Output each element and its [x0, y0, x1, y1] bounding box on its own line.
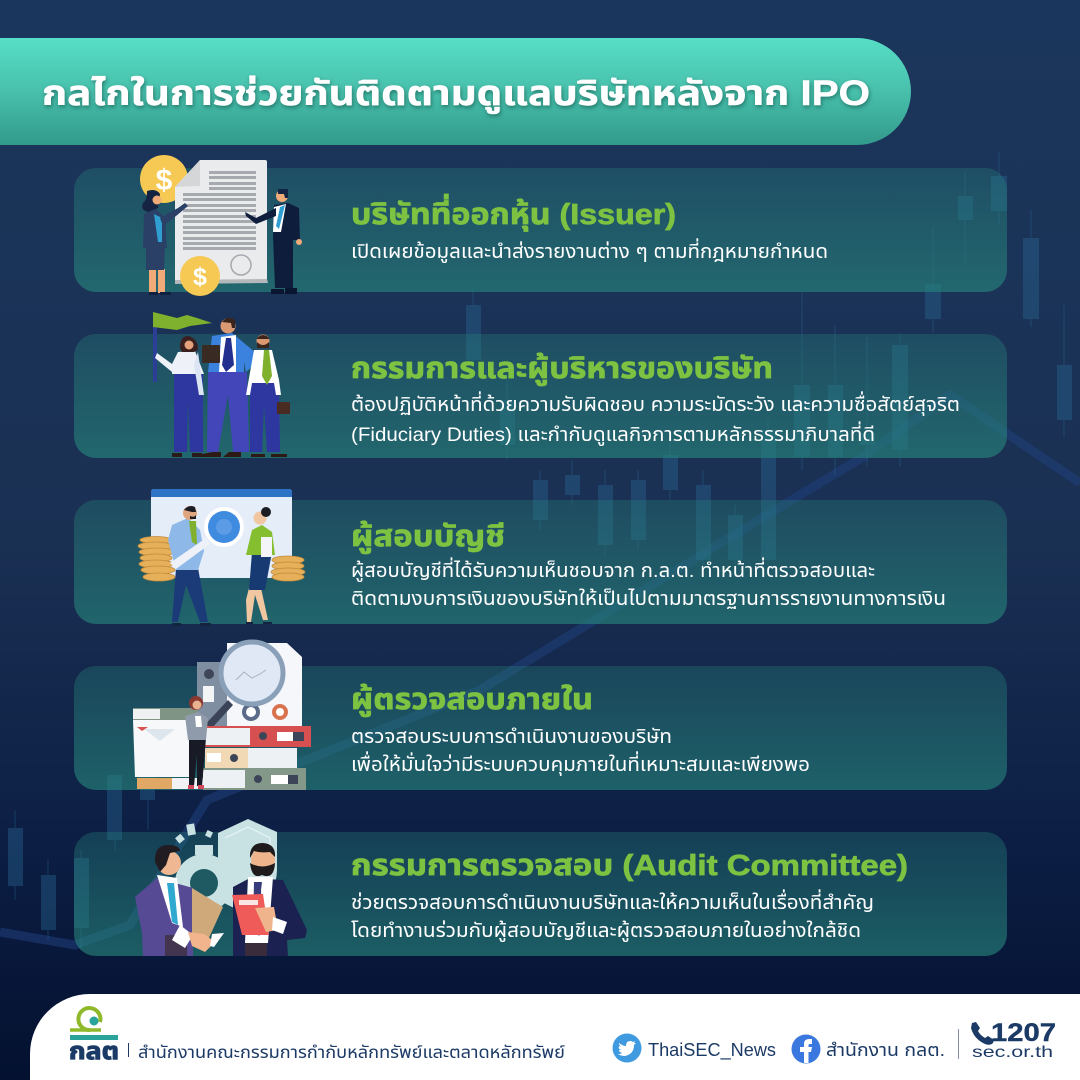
panel: internal audit — [74, 642, 1007, 790]
text: directors: ต้องปฏิบัติหน้าที่ด้วยความรับผิดชอบ ความระมัดระวัง และความซื่อสัตย์สุจริต — [351, 391, 960, 416]
header banner — [0, 38, 911, 145]
icon: SEC logo — [69, 1008, 119, 1065]
icon: three executives with flag — [153, 312, 290, 457]
woman — [149, 269, 165, 293]
left man — [135, 878, 193, 956]
woman — [174, 373, 203, 452]
background candlestick chart — [8, 152, 1072, 950]
heading: audit committee: กรรมการตรวจสอบ (Audit Committee) — [351, 850, 908, 882]
woman — [246, 588, 268, 622]
man — [172, 568, 208, 622]
facebook name: สำนักงาน กลต. — [826, 1040, 945, 1060]
hotline: 1207 — [991, 1019, 1056, 1047]
right man — [250, 382, 280, 452]
heading: directors: กรรมการและผู้บริหารของบริษัท — [351, 353, 773, 386]
text: internal audit: ตรวจสอบระบบการดำเนินงานของบริษัท — [351, 726, 672, 748]
man — [273, 203, 300, 288]
heading: internal audit: ผู้ตรวจสอบภายใน — [351, 684, 593, 717]
text: audit committee: โดยทำงานร่วมกับผู้สอบบัญชีและผู้ตรวจสอบภายในอย่างใกล้ชิด — [351, 919, 861, 943]
panel: issuer — [74, 155, 1007, 296]
icon: document with coins and two people: $ — [156, 164, 173, 197]
divider — [128, 1043, 129, 1057]
website: sec.or.th — [972, 1044, 1053, 1061]
twitter handle: ThaiSEC_News — [648, 1040, 776, 1061]
icon: facebook — [792, 1034, 820, 1064]
heading: issuer: บริษัทที่ออกหุ้น (Issuer) — [351, 193, 676, 231]
title: กลไกในการช่วยกันติดตามดูแลบริษัทหลังจาก IPO — [42, 74, 870, 114]
text: audit committee — [351, 889, 874, 943]
divider — [958, 1029, 959, 1059]
icon: SEC logo: กลต — [69, 1038, 119, 1065]
heading: auditor: ผู้สอบบัญชี — [351, 521, 505, 554]
background trend line — [0, 395, 1080, 945]
text: directors: (Fiduciary Duties) และกำกับดูแลกิจการตามหลักธรรมาภิบาลที่ดี — [351, 421, 875, 447]
icon: two auditors with magnifier and coin stacks — [138, 489, 305, 626]
tall man — [207, 372, 249, 452]
text: issuer: เปิดเผยข้อมูลและนำส่งรายงานต่าง ๆ ตามที่กฎหมายกำหนด — [351, 238, 828, 264]
icon: document with coins and two people — [140, 155, 302, 296]
icon: handshake with gear and shield — [135, 819, 307, 956]
text: audit committee: ช่วยตรวจสอบการดำเนินงานบริษัทและให้ความเห็นในเรื่องที่สำคัญ — [351, 889, 874, 914]
text: auditor: ผู้สอบบัญชีที่ได้รับความเห็นชอบจาก ก.ล.ต. ทำหน้าที่ตรวจสอบและ — [351, 557, 875, 583]
text: auditor — [351, 557, 946, 610]
right man — [233, 878, 307, 956]
panel: directors — [74, 312, 1007, 458]
organisation name: สำนักงานคณะกรรมการกำกับหลักทรัพย์และตลาดหลักทรัพย์ — [138, 1044, 565, 1062]
text: internal audit — [351, 726, 810, 776]
woman — [189, 738, 206, 786]
panel: audit committee — [74, 819, 1007, 956]
icon: binders, documents and magnifier — [133, 642, 311, 790]
panel: auditor — [74, 489, 1007, 626]
icon: twitter — [612, 1034, 642, 1062]
icon: phone — [971, 1022, 994, 1045]
footer — [30, 994, 1080, 1080]
icon: document with coins and two people: $ — [193, 263, 207, 291]
text: internal audit: เพื่อให้มั่นใจว่ามีระบบควบคุมภายในที่เหมาะสมและเพียงพอ — [351, 751, 810, 776]
text: auditor: ติดตามงบการเงินของบริษัทให้เป็นไปตามมาตรฐานการรายงานทางการเงิน — [351, 587, 946, 610]
text: directors — [351, 391, 960, 447]
